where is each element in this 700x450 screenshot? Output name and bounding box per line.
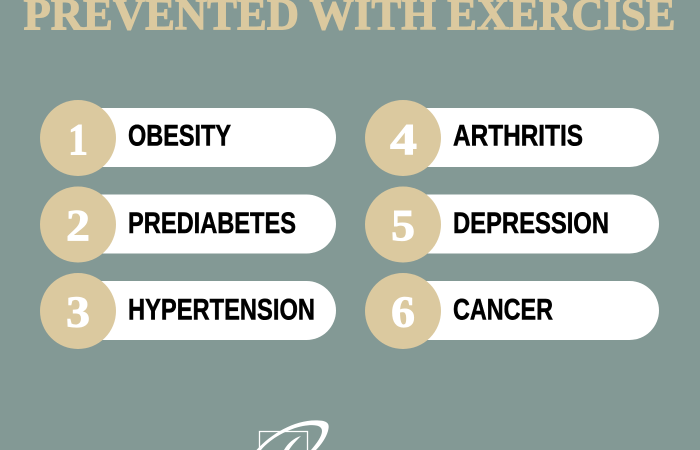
item 3: hypertension: 3 <box>66 288 90 336</box>
item 6: cancer <box>365 273 659 349</box>
item 1: obesity: OBESITY <box>128 120 231 152</box>
item 6: cancer: CANCER <box>453 294 553 326</box>
item 1: obesity: 1 <box>68 115 88 164</box>
item 2: prediabetes: 2 <box>66 201 90 250</box>
item 4: arthritis: 4 <box>390 115 417 164</box>
item 5: depression: DEPRESSION <box>453 207 609 240</box>
item 1: obesity <box>40 100 336 176</box>
item 4: arthritis <box>365 100 659 176</box>
item 5: depression: 5 <box>391 201 415 250</box>
item 3: hypertension: HYPERTENSION <box>128 294 315 326</box>
item 4: arthritis: ARTHRITIS <box>453 120 583 152</box>
item 5: depression <box>365 186 659 262</box>
item 6: cancer: 6 <box>391 288 415 336</box>
item 2: prediabetes: PREDIABETES <box>128 207 296 240</box>
icon: logo <box>256 420 329 450</box>
item 2: prediabetes <box>40 186 336 262</box>
item 3: hypertension <box>40 273 336 349</box>
